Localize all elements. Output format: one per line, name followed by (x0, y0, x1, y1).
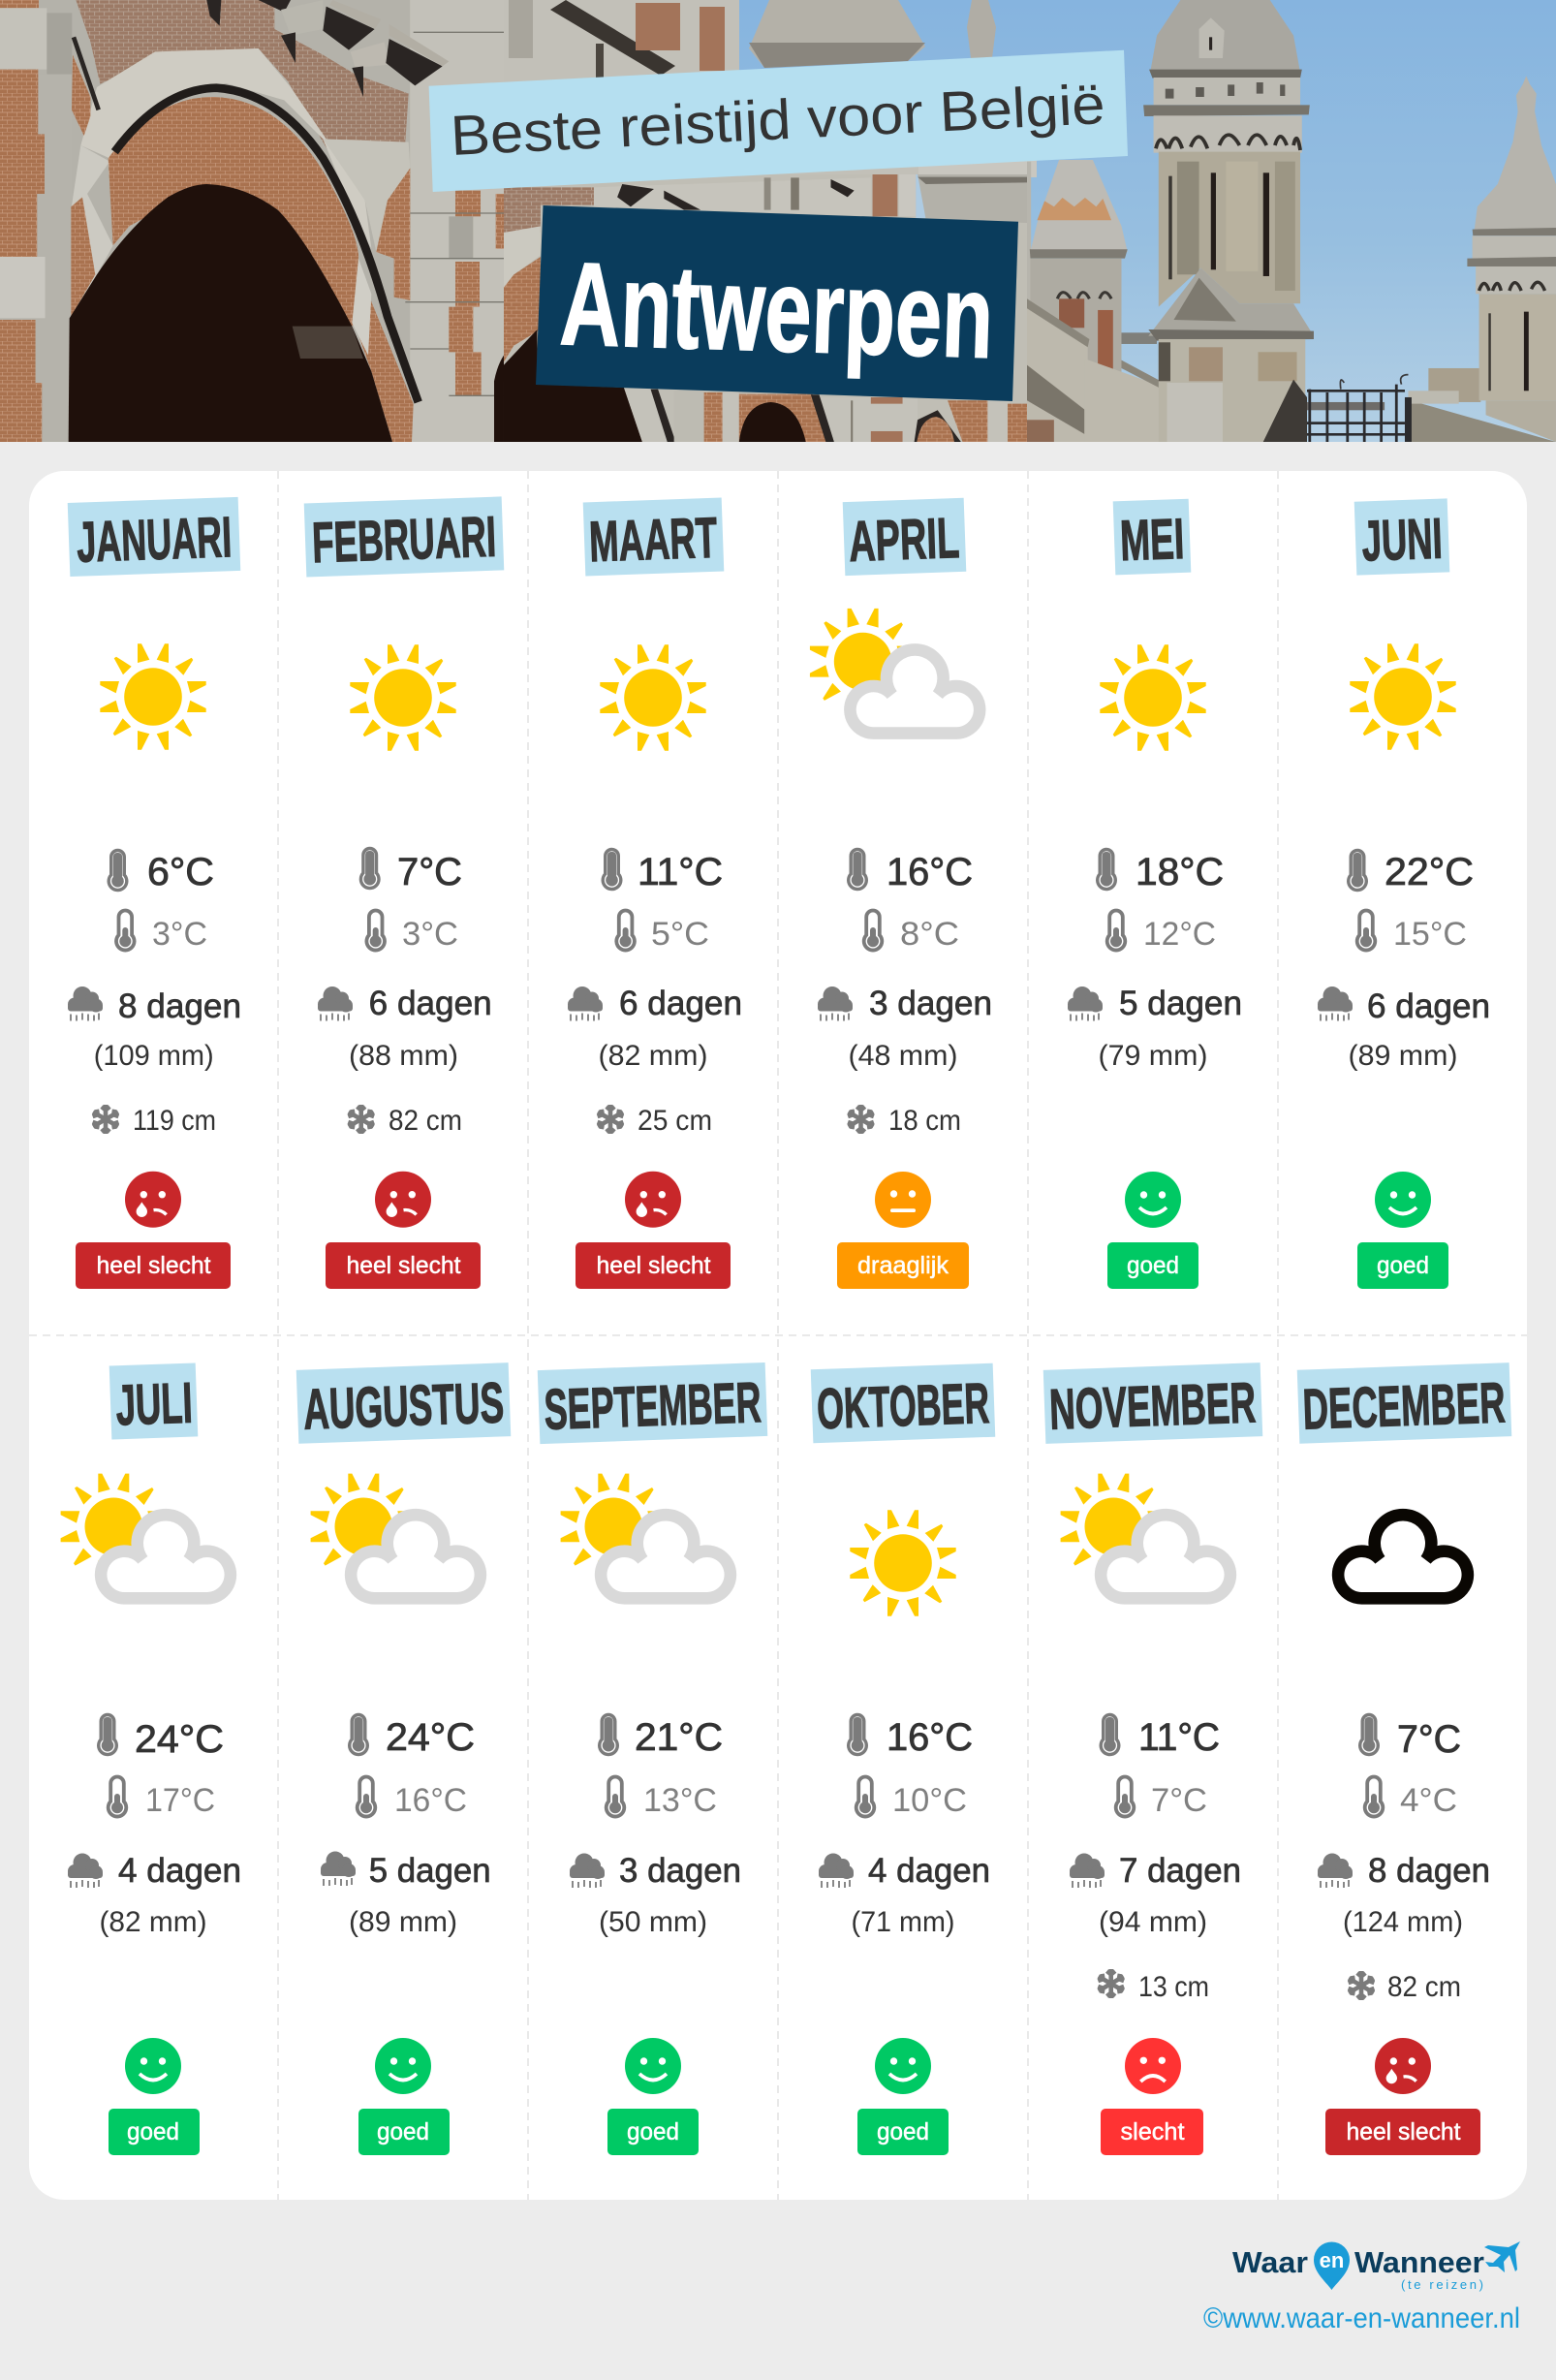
high temperature: 7°C (1397, 1718, 1461, 1761)
badge: goed: goed (127, 2118, 179, 2145)
high temperature: 24°C (135, 1718, 224, 1761)
icon: snowflake (1347, 1971, 1376, 2000)
high temperature: 7°C (397, 851, 462, 893)
heading: november: NOVEMBER (1048, 1370, 1257, 1442)
high temperature: 11°C (1138, 1716, 1220, 1759)
icon: happy face (875, 2038, 931, 2094)
rainfall: (124 mm) (1343, 1906, 1463, 1938)
low temperature: 10°C (892, 1782, 967, 1819)
icon: rain (1068, 986, 1103, 1021)
panel: mei (1068, 499, 1242, 1289)
icon: rain (1318, 1853, 1353, 1888)
rain days: 5 dagen (1119, 985, 1242, 1022)
icon: sun and cloud (311, 1474, 481, 1598)
logo: Waar en Wanneer (1232, 2241, 1520, 2292)
icon: snowflake (596, 1105, 625, 1134)
badge: goed: goed (1127, 1252, 1179, 1279)
icon: thermometer low (366, 911, 385, 951)
rain days: 8 dagen (118, 987, 241, 1025)
icon: thermometer low (856, 1777, 874, 1817)
rainfall: (82 mm) (599, 1040, 707, 1072)
low temperature: 4°C (1400, 1782, 1457, 1819)
heading: juli: JULI (114, 1371, 194, 1437)
icon: sun and cloud (1061, 1474, 1230, 1598)
banner: subtitle: Beste reistijd voor België (449, 73, 1106, 168)
high temperature: 24°C (386, 1716, 475, 1759)
icon: thermometer high (849, 850, 866, 890)
low temperature: 12°C (1143, 916, 1216, 953)
badge: goed: goed (877, 2118, 929, 2145)
icon: snowflake (846, 1105, 876, 1134)
low temperature: 3°C (402, 916, 458, 953)
icon: sun and cloud (61, 1474, 231, 1598)
badge: goed: goed (377, 2118, 429, 2145)
icon: thermometer low (864, 911, 882, 951)
icon: sun (1100, 644, 1206, 751)
high temperature: 6°C (147, 851, 214, 893)
icon: crying face (375, 1172, 431, 1228)
icon: thermometer low (616, 911, 635, 951)
badge: slecht: slecht (1120, 2118, 1185, 2145)
rain days: 3 dagen (869, 985, 992, 1022)
icon: thermometer high (99, 1715, 116, 1755)
panel: september (538, 1362, 767, 2155)
icon: rain (568, 986, 603, 1021)
header photo: Antwerpen bridge and towers (0, 0, 1556, 442)
icon: thermometer high (1101, 1715, 1119, 1755)
badge: heel slecht: heel slecht (97, 1252, 211, 1279)
heading: maart (583, 498, 724, 576)
icon: black cloud (1338, 1515, 1468, 1598)
icon: crying face (1375, 2038, 1431, 2094)
icon: thermometer low (1365, 1777, 1383, 1817)
badge: goed: goed (1377, 1252, 1429, 1279)
icon: rain (1070, 1853, 1105, 1888)
rainfall: (50 mm) (599, 1906, 707, 1938)
icon: happy face (125, 2038, 181, 2094)
panel: augustus (296, 1362, 511, 2155)
heading: juni: JUNI (1360, 507, 1444, 573)
panel: juni (1318, 498, 1490, 1289)
low temperature: 16°C (394, 1782, 467, 1819)
heading: april (843, 498, 966, 576)
heading: juni (1354, 498, 1449, 576)
rainfall: (94 mm) (1099, 1906, 1207, 1938)
badge: goed (1357, 1242, 1448, 1289)
rain days: 6 dagen (619, 985, 742, 1022)
badge: heel slecht: heel slecht (597, 1252, 711, 1279)
icon: sun (100, 643, 206, 750)
high temperature: 16°C (887, 851, 973, 893)
heading: september (538, 1362, 767, 1444)
panel: december (1297, 1362, 1511, 2155)
icon: sun (1350, 643, 1456, 750)
badge: heel slecht (1325, 2109, 1480, 2155)
high temperature: 22°C (1385, 851, 1474, 893)
rainfall: (109 mm) (94, 1040, 214, 1072)
low temperature: 17°C (145, 1782, 215, 1819)
icon: crying face (125, 1172, 181, 1228)
icon: thermometer low (358, 1777, 375, 1817)
icon: thermometer low (109, 1777, 126, 1817)
panel: oktober (811, 1363, 995, 2155)
heading: mei: MEI (1119, 507, 1185, 573)
icon: thermometer low (1107, 911, 1125, 951)
panel: januari (68, 497, 241, 1289)
icon: snowflake (347, 1105, 376, 1134)
high temperature: 21°C (635, 1716, 723, 1759)
icon: thermometer low (1116, 1777, 1134, 1817)
rain days: 7 dagen (1119, 1852, 1241, 1890)
rain days: 5 dagen (369, 1852, 491, 1890)
badge: draaglijk: draaglijk (857, 1252, 949, 1279)
banner: subtitle (429, 50, 1128, 192)
banner: city title (536, 205, 1018, 401)
icon: thermometer high (1360, 1715, 1378, 1755)
icon: rain (1318, 986, 1353, 1021)
snowfall: 82 cm (1387, 1971, 1461, 2003)
badge: goed (358, 2109, 450, 2155)
icon: happy face (1125, 1172, 1181, 1228)
icon: thermometer low (116, 911, 135, 951)
icon: map pin (1314, 2242, 1350, 2290)
rain days: 6 dagen (369, 985, 492, 1022)
panel: april (810, 498, 992, 1289)
rain days: 3 dagen (619, 1852, 741, 1890)
heading: februari: FEBRUARI (311, 505, 497, 575)
panel: juli (61, 1362, 241, 2155)
icon: thermometer high (360, 849, 379, 889)
icon: happy face (375, 2038, 431, 2094)
low temperature: 13°C (643, 1782, 717, 1819)
low temperature: 3°C (152, 916, 207, 953)
icon: thermometer high (603, 850, 621, 890)
rainfall: (88 mm) (349, 1040, 458, 1072)
high temperature: 18°C (1136, 851, 1224, 893)
heading: maart: MAART (588, 506, 718, 574)
icon: rain (570, 1853, 605, 1888)
banner: city title: Antwerpen (558, 237, 995, 383)
rainfall: (82 mm) (99, 1906, 207, 1938)
low temperature: 8°C (900, 916, 959, 953)
logo: Waar en Wanneer: en (1320, 2248, 1344, 2272)
rainfall: (71 mm) (851, 1906, 955, 1938)
heading: juli (109, 1362, 198, 1440)
heading: april: APRIL (848, 506, 960, 574)
panel: maart (568, 498, 742, 1289)
icon: thermometer high (1349, 851, 1366, 891)
icon: thermometer high (1098, 850, 1115, 890)
badge: goed: goed (627, 2118, 679, 2145)
icon: snowflake (91, 1105, 120, 1134)
icon: sad face (1125, 2038, 1181, 2094)
badge: goed (1107, 1242, 1198, 1289)
icon: rain (819, 1853, 854, 1888)
badge: slecht (1101, 2109, 1203, 2155)
badge: goed (607, 2109, 699, 2155)
heading: januari (68, 497, 240, 577)
high temperature: 11°C (638, 851, 723, 893)
heading: oktober: OKTOBER (816, 1371, 990, 1441)
icon: rain (68, 986, 103, 1021)
snowfall: 119 cm (133, 1105, 216, 1137)
icon: happy face (625, 2038, 681, 2094)
logo: Waar en Wanneer: Wanneer (1354, 2245, 1484, 2279)
badge: heel slecht: heel slecht (347, 1252, 461, 1279)
icon: sun and cloud (561, 1474, 731, 1598)
icon: neutral face (875, 1172, 931, 1228)
icon: thermometer high (849, 1715, 866, 1755)
icon: rain (318, 986, 353, 1021)
high temperature: 16°C (887, 1716, 973, 1759)
heading: augustus: AUGUSTUS (302, 1370, 505, 1442)
icon: sun and cloud (810, 609, 980, 734)
icon: thermometer low (607, 1777, 624, 1817)
panel: month card (29, 471, 1527, 2200)
logo: Waar en Wanneer: Waar (1232, 2245, 1308, 2279)
rainfall: (89 mm) (349, 1906, 457, 1938)
panel: februari (304, 496, 504, 1289)
rain days: 4 dagen (118, 1852, 241, 1890)
low temperature: 7°C (1151, 1782, 1207, 1819)
badge: heel slecht (576, 1242, 731, 1289)
badge: heel slecht (76, 1242, 231, 1289)
rainfall: (48 mm) (849, 1040, 957, 1072)
rainfall: (89 mm) (1349, 1040, 1457, 1072)
heading: mei (1113, 499, 1191, 575)
low temperature: 15°C (1393, 916, 1467, 953)
icon: snowflake (1097, 1969, 1126, 1998)
icon: thermometer high (109, 851, 127, 891)
icon: rain (321, 1851, 356, 1886)
icon: happy face (1375, 1172, 1431, 1228)
heading: januari: JANUARI (76, 505, 233, 575)
snowfall: 82 cm (389, 1105, 462, 1137)
icon: airplane (1484, 2241, 1520, 2272)
icon: thermometer low (1357, 911, 1375, 951)
snowfall: 25 cm (638, 1105, 712, 1137)
badge: goed (857, 2109, 949, 2155)
website url: ©www.waar-en-wanneer.nl (1203, 2302, 1520, 2334)
panel: november (1043, 1362, 1262, 2155)
snowfall: 18 cm (888, 1105, 961, 1137)
heading: november (1043, 1362, 1262, 1444)
heading: oktober (811, 1363, 995, 1443)
icon: thermometer high (600, 1715, 617, 1755)
badge: draaglijk (837, 1242, 969, 1289)
heading: februari (304, 496, 504, 578)
badge: heel slecht (326, 1242, 481, 1289)
icon: sun (600, 644, 706, 751)
heading: augustus (296, 1362, 511, 1444)
badge: goed (109, 2109, 200, 2155)
icon: sun (350, 644, 456, 751)
snowfall: 13 cm (1138, 1971, 1209, 2003)
icon: sun (850, 1510, 956, 1616)
badge: heel slecht: heel slecht (1347, 2118, 1461, 2145)
rain days: 4 dagen (868, 1852, 990, 1890)
logo: Waar en Wanneer: (te reizen) (1401, 2277, 1483, 2292)
icon: rain (68, 1853, 103, 1888)
icon: rain (818, 986, 853, 1021)
rainfall: (79 mm) (1099, 1040, 1207, 1072)
heading: september: SEPTEMBER (544, 1370, 762, 1442)
rain days: 8 dagen (1368, 1852, 1490, 1890)
icon: crying face (625, 1172, 681, 1228)
low temperature: 5°C (651, 916, 709, 953)
rain days: 6 dagen (1367, 987, 1490, 1025)
icon: thermometer high (350, 1715, 367, 1755)
